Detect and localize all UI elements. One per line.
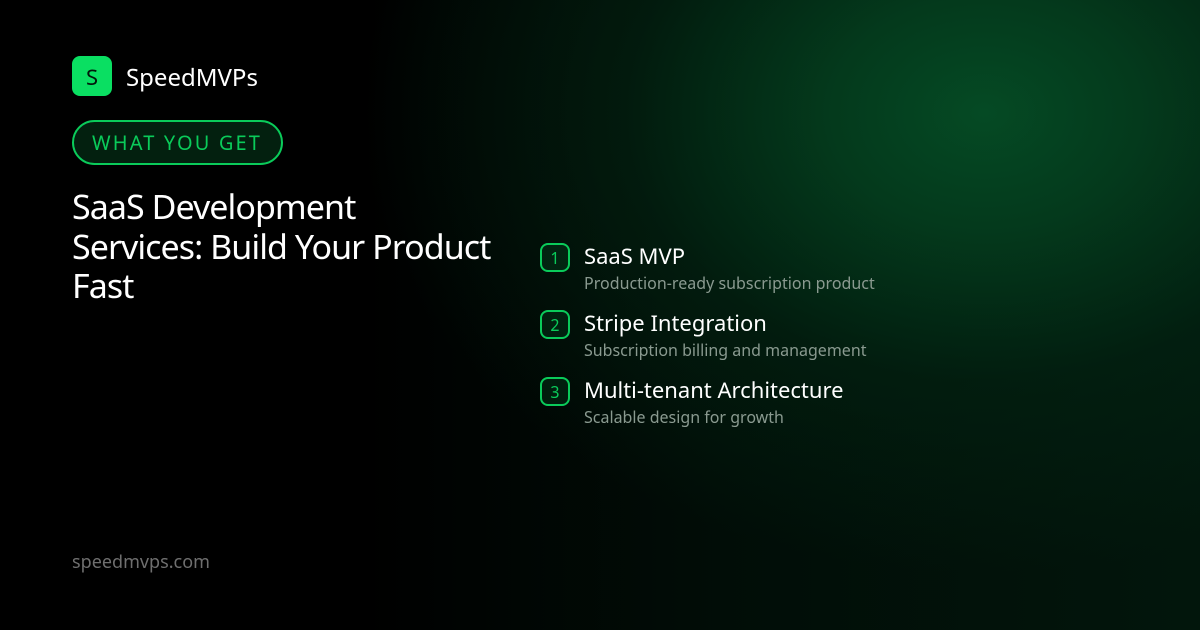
number 3 xyxy=(540,377,570,406)
logo icon: S xyxy=(86,62,98,92)
number 1: 1 xyxy=(550,247,560,269)
number 3: 3 xyxy=(550,381,560,403)
number 2 xyxy=(540,310,570,339)
feature list xyxy=(540,241,875,428)
heading: Stripe Integration xyxy=(584,308,767,338)
heading: Multi-tenant Architecture xyxy=(584,375,844,405)
title: Fast xyxy=(72,262,133,308)
logo xyxy=(72,56,258,96)
title xyxy=(72,183,491,308)
description: Production-ready subscription product xyxy=(584,272,875,294)
title: SaaS Development xyxy=(72,183,355,229)
number 2: 2 xyxy=(550,314,560,336)
feature 3 xyxy=(540,375,844,428)
title: Services: Build Your Product xyxy=(72,222,490,268)
number 1 xyxy=(540,243,570,272)
logo icon xyxy=(72,56,112,96)
badge: WHAT YOU GET xyxy=(92,129,262,156)
footer url: speedmvps.com xyxy=(72,550,210,574)
brand name: SpeedMVPs xyxy=(126,61,258,94)
description: Subscription billing and management xyxy=(584,339,866,361)
feature 1 xyxy=(540,241,875,294)
heading: SaaS MVP xyxy=(584,241,685,271)
description: Scalable design for growth xyxy=(584,406,784,428)
feature 2 xyxy=(540,308,866,361)
badge xyxy=(72,120,283,165)
